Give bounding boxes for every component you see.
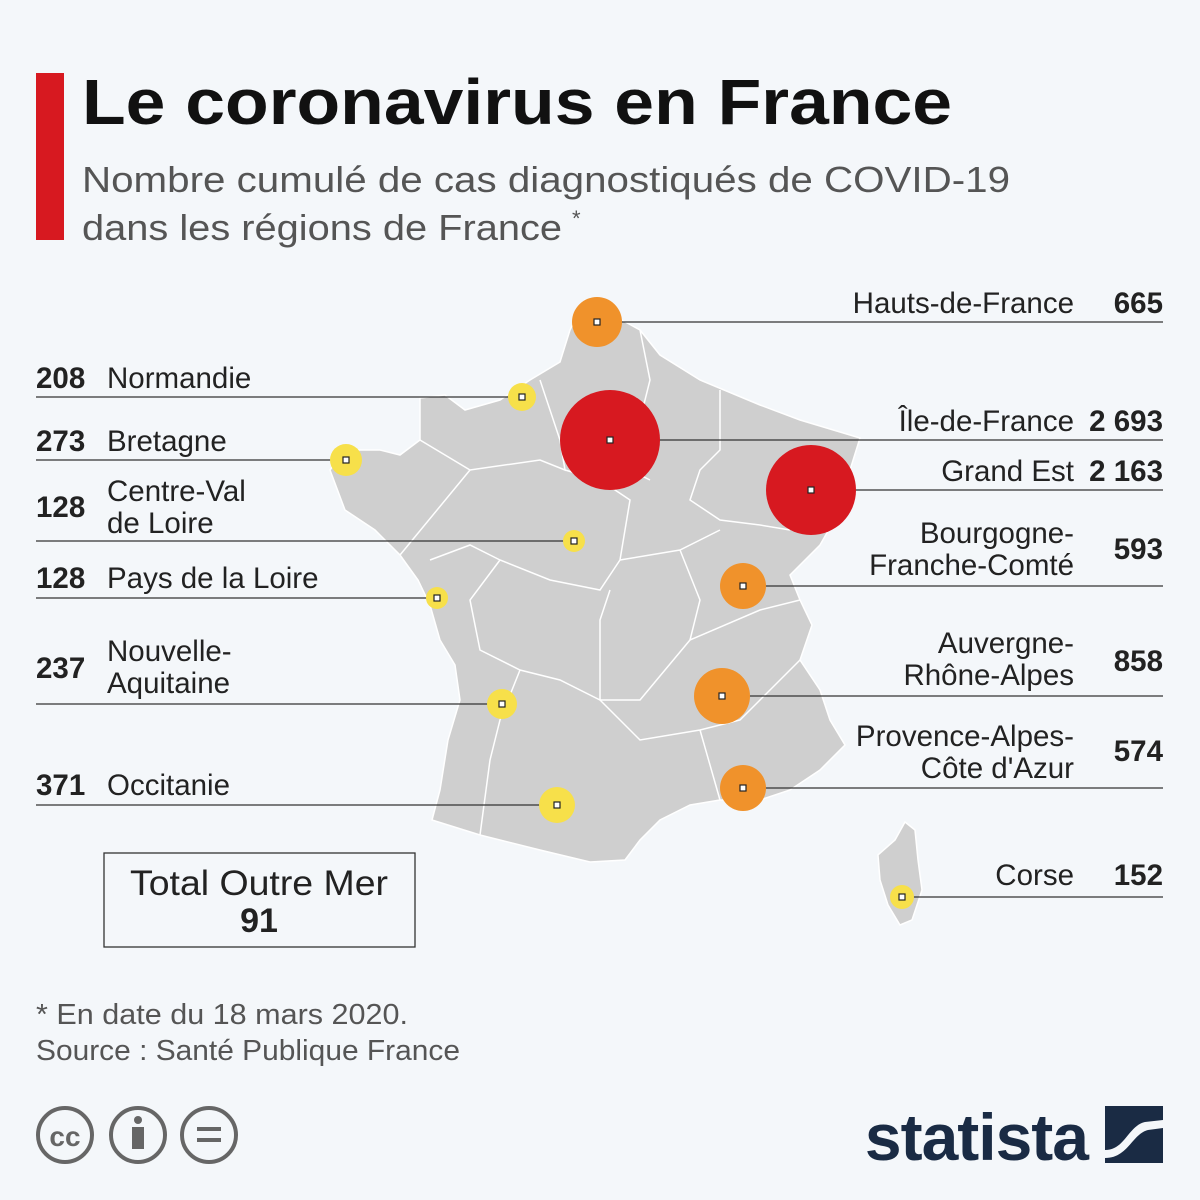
- right labels: 593: [1114, 533, 1163, 566]
- right labels: Auvergne-: [938, 627, 1074, 660]
- right labels: 574: [1114, 735, 1164, 768]
- right labels: Île-de-France: [898, 405, 1074, 438]
- title: Le coronavirus en France: [82, 66, 952, 138]
- footnote: Source : Santé Publique France: [36, 1035, 460, 1067]
- overseas total box: [104, 853, 415, 947]
- subtitle: dans les régions de France: [82, 207, 562, 248]
- right labels: Franche-Comté: [869, 549, 1074, 582]
- right labels: 858: [1114, 645, 1163, 678]
- subtitle: *: [572, 206, 581, 231]
- left labels: Aquitaine: [107, 667, 230, 700]
- region borders: [400, 330, 800, 835]
- overseas total box: 91: [240, 902, 278, 940]
- left labels: 128: [36, 491, 85, 524]
- right labels: Provence-Alpes-: [856, 720, 1074, 753]
- right labels: Côte d'Azur: [921, 752, 1074, 785]
- map: Corsica: [878, 822, 922, 925]
- right labels: 2 163: [1089, 455, 1163, 488]
- left labels: 208: [36, 362, 85, 395]
- license icons: cc: [49, 1121, 81, 1152]
- right labels: Corse: [995, 859, 1074, 892]
- footnote: * En date du 18 mars 2020.: [36, 999, 408, 1031]
- right labels: Bourgogne-: [920, 517, 1074, 550]
- left labels: Pays de la Loire: [107, 562, 319, 595]
- license icons: [38, 1108, 236, 1162]
- bubbles: [330, 297, 914, 909]
- left labels: [36, 362, 319, 802]
- right labels: Grand Est: [941, 455, 1074, 488]
- right labels: 665: [1114, 287, 1163, 320]
- overseas total box: Total Outre Mer: [130, 864, 388, 903]
- right labels: [853, 287, 1164, 892]
- left labels: 237: [36, 652, 85, 685]
- subtitle: Nombre cumulé de cas diagnostiqués de COVID-19: [82, 159, 1010, 200]
- right labels: 152: [1114, 859, 1163, 892]
- statista logo: statista: [865, 1100, 1090, 1174]
- footnote: [36, 999, 460, 1067]
- left labels: Occitanie: [107, 769, 230, 802]
- left labels: Bretagne: [107, 425, 227, 458]
- left labels: 273: [36, 425, 85, 458]
- leader lines: [36, 322, 1163, 897]
- subtitle: [82, 159, 1010, 248]
- right labels: Rhône-Alpes: [903, 659, 1074, 692]
- left labels: de Loire: [107, 507, 214, 540]
- title bar accent: [36, 73, 64, 240]
- left labels: 128: [36, 562, 85, 595]
- map: France: [330, 300, 922, 925]
- right labels: 2 693: [1089, 405, 1163, 438]
- left labels: 371: [36, 769, 85, 802]
- left labels: Normandie: [107, 362, 251, 395]
- right labels: Hauts-de-France: [853, 287, 1074, 320]
- left labels: Nouvelle-: [107, 635, 232, 668]
- left labels: Centre-Val: [107, 475, 246, 508]
